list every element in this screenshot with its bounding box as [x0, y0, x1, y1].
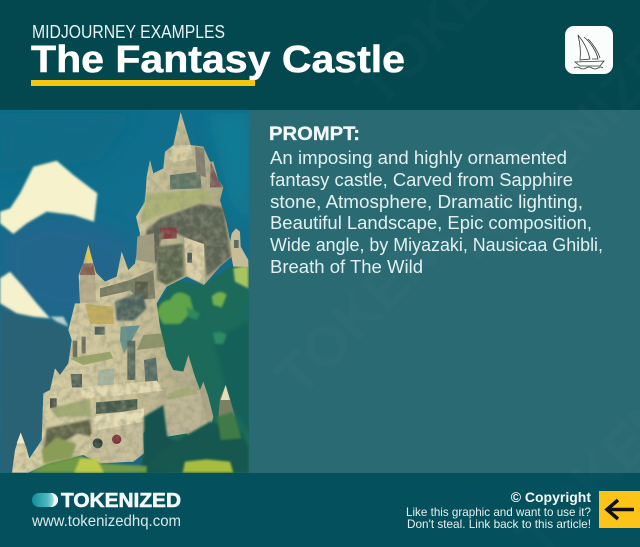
dark cloud: [0, 307, 72, 472]
header background: [0, 0, 640, 110]
icon: midjourney sailboat logo: [565, 26, 613, 74]
header text: [31, 22, 405, 81]
foliage bright: [157, 292, 193, 324]
castle image: [0, 110, 250, 473]
prompt body: Breath of The Wild: [270, 257, 423, 277]
castle base: [90, 434, 144, 462]
footer background: [0, 473, 640, 547]
cloud lower: [0, 272, 50, 318]
side turret: [229, 228, 248, 267]
shadow below castle: [140, 404, 176, 472]
icon: left arrow: [607, 500, 634, 519]
sky glows: [0, 213, 133, 320]
copyright line one: Like this graphic and want to use it?: [406, 505, 591, 519]
brand name: TOKENIZED: [61, 490, 181, 512]
castle silhouette: [12, 112, 232, 473]
copyright note: [406, 489, 591, 531]
panel: prompt text: [269, 124, 603, 277]
mottled stone texture: [12, 112, 232, 473]
title: The Fantasy Castle: [31, 39, 405, 81]
mid castle details: [100, 270, 155, 300]
prompt heading: PROMPT:: [269, 124, 360, 145]
footer brand logo: [31, 490, 181, 530]
icon: tokenized pill: [32, 493, 58, 507]
prompt body: Wide angle, by Miyazaki, Nausicaa Ghibli,: [270, 235, 603, 255]
prompt body: fantasy castle, Carved from Sapphire: [270, 170, 573, 190]
ground greens: [143, 422, 248, 473]
eyebrow: MIDJOURNEY EXAMPLES: [32, 22, 225, 42]
upper tower details: [170, 172, 202, 189]
prompt body: An imposing and highly ornamented: [270, 148, 567, 168]
copyright heading: © Copyright: [511, 489, 591, 505]
copyright line two: Don't steal. Link back to this article!: [407, 517, 591, 531]
hill: [140, 263, 250, 473]
small right tower: [218, 385, 235, 417]
prompt body: [270, 148, 603, 277]
prompt panel background: [249, 110, 640, 473]
watermark: [263, 0, 640, 547]
website url: www.tokenizedhq.com: [31, 513, 181, 530]
cloud upper: [0, 161, 97, 234]
prompt body: stone, Atmosphere, Dramatic lighting,: [270, 192, 583, 212]
title underline: [31, 80, 255, 86]
prompt body: Beautiful Landscape, Epic composition,: [270, 213, 592, 233]
arrow box: [599, 491, 640, 528]
